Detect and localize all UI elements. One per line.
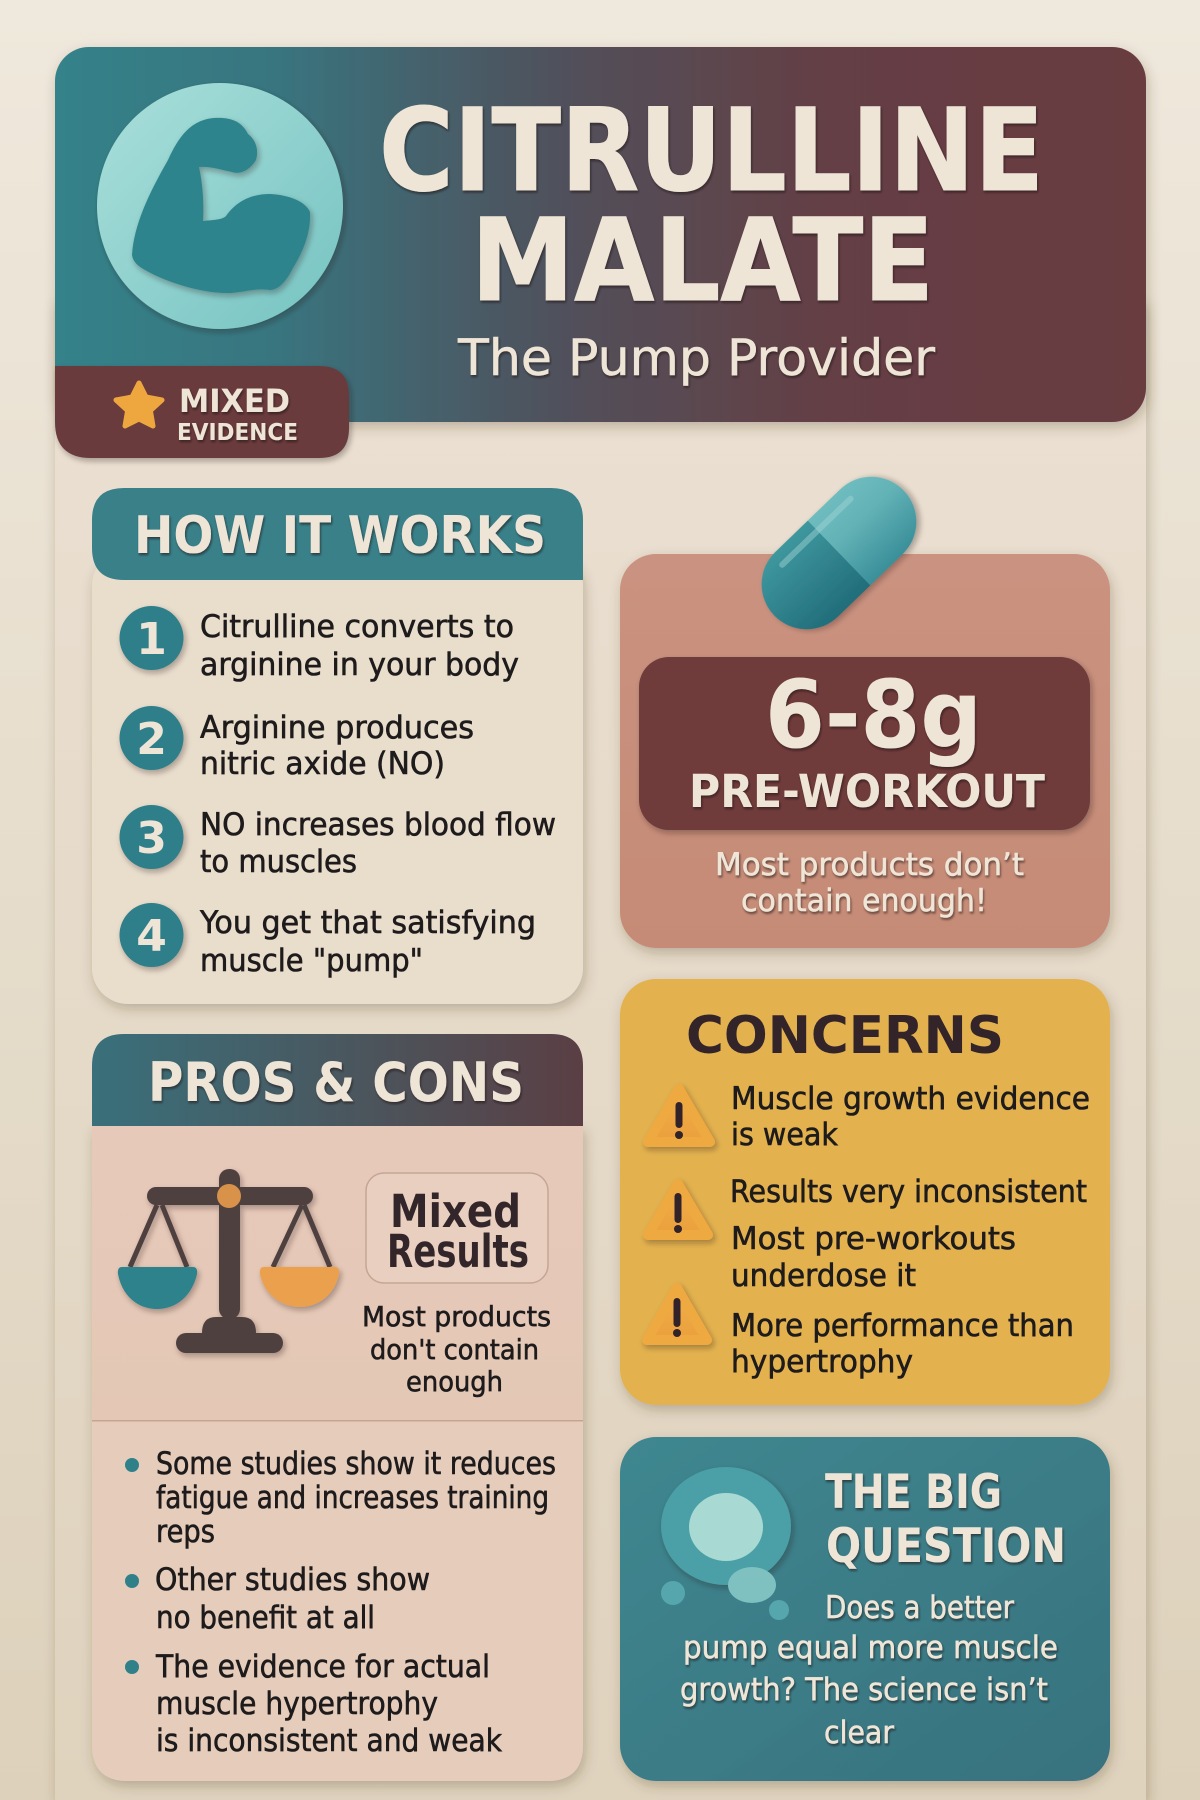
- step 4: muscle "pump": [200, 943, 423, 979]
- dose callout: 6-8g: [765, 661, 982, 770]
- heading: how it works: HOW IT WORKS: [134, 506, 546, 566]
- dose callout: [639, 657, 1090, 830]
- mixed results note: [362, 1300, 551, 1398]
- icon: warning 1: [648, 1089, 710, 1142]
- bullet 1: fatigue and increases training: [156, 1480, 549, 1516]
- step 3: 3: [136, 813, 167, 864]
- mixed results note: enough: [406, 1365, 503, 1398]
- concern 3: [731, 1221, 1016, 1294]
- bullet 3: The evidence for actual: [155, 1649, 490, 1685]
- heading: the big question: THE BIG: [825, 1465, 1002, 1520]
- panel: how it works: [92, 488, 583, 1004]
- panel: pros and cons: [92, 1034, 583, 1781]
- bullet 3: is inconsistent and weak: [156, 1723, 502, 1759]
- badge text: [177, 382, 298, 446]
- step 1: 1: [136, 614, 167, 665]
- heading: how it works: [92, 488, 583, 580]
- bullet 1: reps: [156, 1514, 215, 1550]
- step 2: [120, 706, 474, 782]
- heading: concerns: CONCERNS: [686, 1006, 1004, 1066]
- main content panel: [55, 300, 1146, 1800]
- badge text: EVIDENCE: [177, 420, 298, 446]
- step 4: [120, 903, 536, 979]
- mixed results box: Results: [387, 1225, 529, 1278]
- mixed results box: [366, 1173, 548, 1283]
- bullet 2: [125, 1562, 430, 1636]
- icon: star: [116, 383, 162, 426]
- icon: warning 2: [648, 1184, 708, 1235]
- step 2: nitric axide (NO): [200, 746, 445, 782]
- panel: concerns: [620, 979, 1110, 1405]
- title: CITRULLINE: [379, 84, 1044, 217]
- icon: thought bubbles: [661, 1467, 791, 1620]
- badge text: MIXED: [179, 382, 290, 420]
- concern 4: hypertrophy: [731, 1344, 913, 1380]
- step 1: arginine in your body: [200, 647, 519, 683]
- bullet 2: Other studies show: [155, 1562, 430, 1598]
- step 3: [120, 805, 556, 880]
- question text: [680, 1590, 1058, 1751]
- heading: the big question: [825, 1465, 1066, 1574]
- step 3: NO increases blood flow: [200, 807, 556, 843]
- concern 4: More performance than: [731, 1308, 1074, 1344]
- dose callout: PRE-WORKOUT: [689, 765, 1045, 818]
- mixed results note: don't contain: [370, 1333, 539, 1366]
- header banner: [55, 47, 1146, 422]
- panel: dosage: [620, 458, 1110, 948]
- concern 2: Results very inconsistent: [730, 1174, 1087, 1210]
- step 1: Citrulline converts to: [200, 609, 514, 645]
- bullet 2: no benefit at all: [156, 1600, 375, 1636]
- title: MALATE: [471, 194, 934, 327]
- icon: warning 3: [647, 1288, 707, 1340]
- concern 1: Muscle growth evidence: [731, 1081, 1090, 1117]
- mixed results box: Mixed: [390, 1185, 521, 1238]
- badge: mixed evidence: [55, 366, 349, 458]
- heading: pros and cons: [92, 1034, 583, 1126]
- bullet 3: [125, 1649, 502, 1759]
- bullet 1: Some studies show it reduces: [156, 1446, 556, 1482]
- icon: capsule: [743, 458, 935, 648]
- subtitle: The Pump Provider: [457, 329, 935, 387]
- concern 4: [731, 1308, 1074, 1380]
- step 1: [120, 606, 519, 683]
- dose note: [715, 847, 1024, 919]
- step 4: 4: [136, 911, 167, 962]
- icon: flexed muscle in circle: [97, 83, 343, 329]
- step 2: Arginine produces: [200, 710, 474, 746]
- question text: clear: [824, 1715, 894, 1751]
- title: [379, 84, 1044, 327]
- step 4: You get that satisfying: [199, 905, 536, 941]
- dose note: Most products don’t: [715, 847, 1024, 883]
- concern 3: Most pre-workouts: [731, 1221, 1016, 1257]
- heading: the big question: QUESTION: [826, 1519, 1066, 1574]
- dose note: contain enough!: [741, 883, 987, 919]
- question text: growth? The science isn’t: [680, 1672, 1048, 1708]
- question text: Does a better: [825, 1590, 1014, 1626]
- bullet 1: [125, 1446, 556, 1550]
- upper section background: [92, 1126, 583, 1420]
- concern 1: [731, 1081, 1090, 1153]
- panel: the big question: [620, 1437, 1110, 1781]
- question text: pump equal more muscle: [683, 1630, 1058, 1666]
- step 2: 2: [136, 714, 167, 765]
- bullet 3: muscle hypertrophy: [156, 1686, 438, 1722]
- step 3: to muscles: [200, 844, 357, 880]
- mixed results note: Most products: [362, 1300, 551, 1333]
- concern 3: underdose it: [731, 1258, 916, 1294]
- heading: pros and cons: PROS & CONS: [148, 1051, 524, 1114]
- concern 1: is weak: [731, 1117, 838, 1153]
- icon: balance scale: [118, 1169, 339, 1353]
